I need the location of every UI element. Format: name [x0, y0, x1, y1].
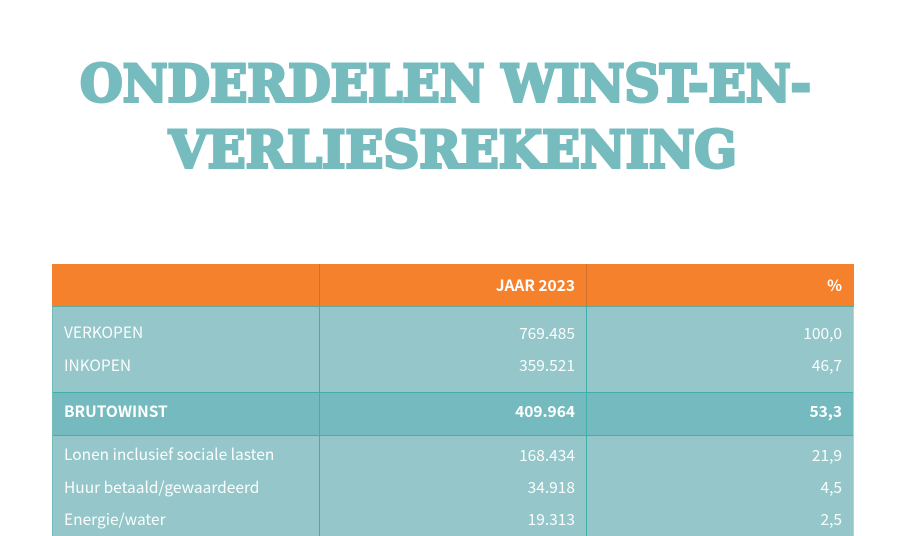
row label: huur: Huur betaald/gewaardeerd [64, 476, 259, 498]
row label: verkopen: VERKOPEN [64, 321, 143, 343]
row label: brutowinst: BRUTOWINST [64, 400, 168, 422]
value: huur: 34.918 [528, 476, 575, 498]
column divider 1 body [319, 306, 320, 536]
header: percent: % [827, 274, 842, 296]
percent: inkopen: 46,7 [812, 354, 842, 376]
percent: verkopen: 100,0 [803, 322, 842, 344]
value: lonen: 168.434 [519, 444, 575, 466]
header rule [52, 306, 854, 307]
row label: inkopen: INKOPEN [64, 354, 131, 376]
percent: lonen: 21,9 [812, 444, 842, 466]
percent: huur: 4,5 [820, 476, 842, 498]
value: verkopen: 769.485 [519, 322, 575, 344]
percent: brutowinst: 53,3 [810, 400, 842, 422]
value: inkopen: 359.521 [519, 354, 575, 376]
title [80, 54, 811, 180]
value: energie: 19.313 [528, 508, 575, 530]
column divider 2 [586, 264, 587, 306]
brutowinst row [52, 392, 854, 436]
title: VERLIESREKENING [168, 120, 737, 180]
title: ONDERDELEN WINST-EN- [80, 54, 811, 114]
row label: lonen: Lonen inclusief sociale lasten [64, 443, 274, 465]
column divider 1 [319, 264, 320, 306]
header: jaar 2023: JAAR 2023 [496, 274, 575, 296]
column divider 2 body [586, 306, 587, 536]
header row [52, 264, 854, 307]
percent: energie: 2,5 [820, 508, 842, 530]
row label: energie: Energie/water [64, 508, 166, 530]
left edge [52, 307, 53, 536]
value: brutowinst: 409.964 [515, 400, 575, 422]
right edge [853, 307, 854, 536]
table [52, 264, 854, 536]
